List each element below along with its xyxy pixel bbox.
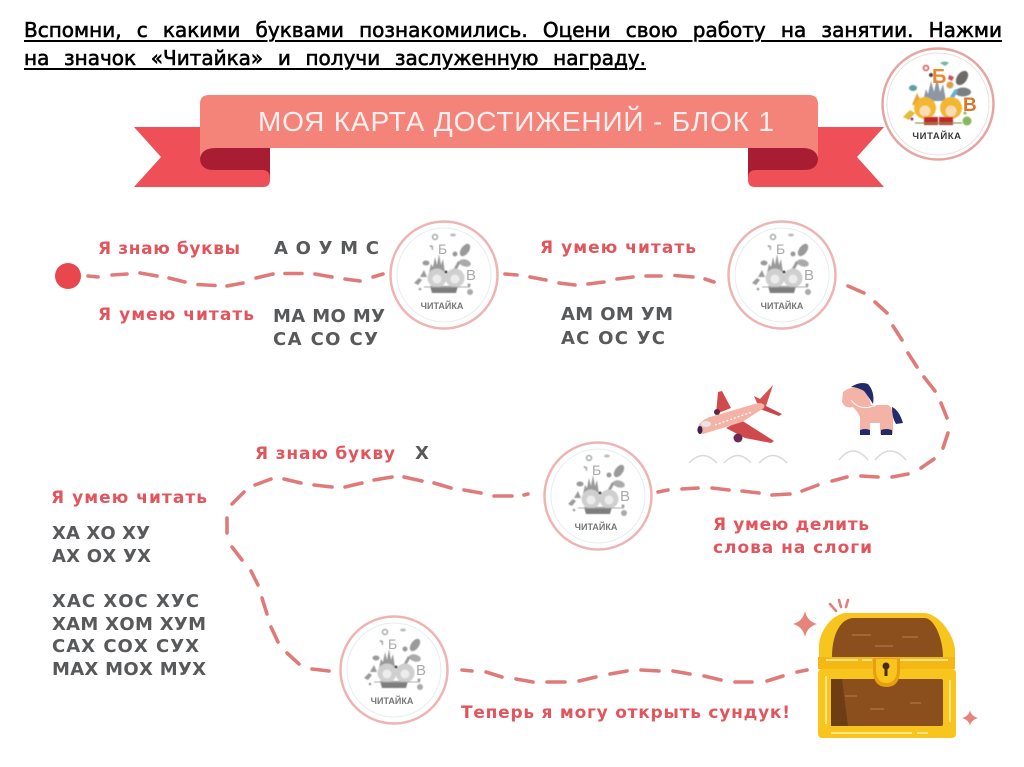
badge 1: В: [466, 267, 476, 284]
badge 2: В: [804, 267, 814, 284]
label: I can split words: [713, 515, 872, 558]
syllables 3: ХА ХО ХУ: [52, 523, 150, 544]
badge letters: Б: [932, 66, 946, 88]
badge 1: ЧИТАЙКА: [421, 300, 464, 311]
label: I can split words: слова на слоги: [713, 538, 872, 558]
syllables 3: ХАМ ХОМ ХУМ: [52, 614, 206, 635]
start dot: [55, 263, 81, 289]
label: I know letters: Я знаю буквы: [98, 239, 240, 259]
badge 4: Б: [388, 636, 397, 652]
badge 2: Б: [776, 241, 785, 257]
achievement path: [88, 273, 948, 682]
syllables 3: ХАС ХОС ХУС: [52, 591, 199, 612]
letters list 1: А О У М С: [274, 238, 379, 259]
badge 4: ЧИТАЙКА: [371, 695, 414, 706]
badge 3: В: [620, 488, 630, 505]
treasure chest: [818, 613, 956, 738]
pony illustration: [842, 383, 903, 435]
syllables 2: АС ОС УС: [561, 328, 665, 349]
badge 3: ЧИТАЙКА: [575, 521, 618, 532]
badge label: ЧИТАЙКА: [912, 130, 962, 142]
syllables 2: АМ ОМ УМ: [561, 304, 673, 325]
label: I can read 1: Я умею читать: [98, 305, 254, 325]
label: I can split words: Я умею делить: [713, 515, 869, 535]
syllables 3: АХ ОХ УХ: [52, 546, 151, 567]
chest sparkle rays: [830, 600, 848, 611]
badge 3: Б: [592, 462, 601, 478]
badge 2: ЧИТАЙКА: [761, 300, 804, 311]
syllables 1: МА МО МУ: [273, 306, 385, 327]
colour Chitaika badge: [882, 48, 994, 160]
label: open the chest: Теперь я могу открыть сундук!: [461, 703, 790, 723]
badge 1: Б: [438, 241, 447, 257]
badge 2: [728, 222, 836, 328]
label: I know letter X: Х: [415, 443, 429, 464]
cloud arcs left: [689, 456, 787, 463]
syllables 2: [561, 304, 673, 349]
syllables 3: [52, 523, 206, 680]
badge 4: [340, 616, 448, 724]
instruction heading: Вспомни, с какими буквами познакомились. Оцени свою работу на занятии. Нажми: [24, 18, 1002, 42]
instruction heading: [24, 18, 1002, 70]
syllables 1: СА СО СУ: [273, 329, 378, 350]
airplane illustration: [697, 385, 782, 443]
badge 4: В: [416, 662, 426, 679]
label: I can read 3: Я умею читать: [51, 488, 207, 508]
syllables 1: [273, 306, 385, 350]
label: I can read 2: Я умею читать: [540, 238, 696, 258]
instruction heading: на значок «Читайка» и получи заслуженную награду.: [24, 46, 646, 70]
sparkle large: [793, 611, 817, 637]
ribbon banner: [134, 95, 884, 187]
sparkle small: [962, 710, 978, 726]
badge 3: [544, 442, 652, 550]
colour Chitaika badge: В: [963, 95, 977, 116]
syllables 3: САХ СОХ СУХ: [52, 636, 199, 657]
label: I know letter X: Я знаю букву: [255, 444, 395, 464]
cloud arcs right: [839, 451, 906, 460]
syllables 3: МАХ МОХ МУХ: [52, 659, 206, 680]
banner title: МОЯ КАРТА ДОСТИЖЕНИЙ - БЛОК 1: [258, 106, 774, 137]
badge 1: [390, 222, 498, 328]
